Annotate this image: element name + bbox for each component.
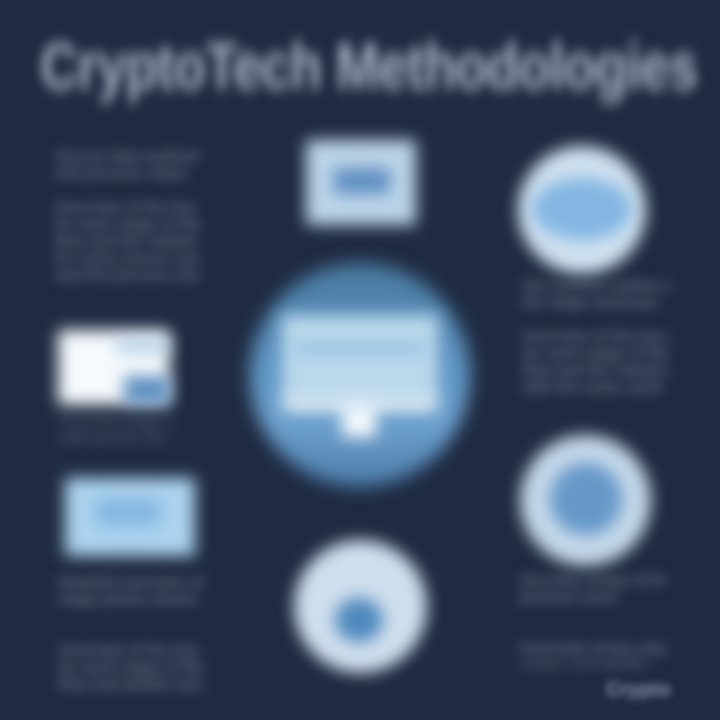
circle body	[250, 263, 470, 487]
card centre	[95, 498, 161, 526]
central hub circle	[238, 252, 482, 498]
text block: left bottom: stage points shown	[58, 591, 198, 608]
text block: left middle	[60, 412, 172, 446]
icon: left white card	[45, 317, 184, 418]
card body	[306, 140, 416, 225]
card centre	[334, 168, 390, 194]
icon: bottom center circle	[282, 528, 439, 685]
text block: left top: Secure data method	[55, 148, 198, 165]
screen	[282, 315, 438, 403]
text block: right lower: process used	[520, 589, 617, 606]
screen lines	[295, 343, 425, 353]
card body	[65, 478, 195, 556]
text block: left bottom	[56, 573, 205, 694]
text block: right upper: with the notes used	[522, 379, 662, 396]
card corner	[124, 376, 170, 404]
text block: left top: and process steps	[55, 165, 187, 182]
icon: top right circle	[506, 134, 658, 286]
inner disc	[532, 178, 632, 240]
title: CryptoTech Methodologies	[40, 29, 697, 103]
outer ring	[518, 146, 646, 274]
screen base	[284, 397, 436, 411]
text block: left top	[52, 147, 202, 285]
pointer	[342, 405, 376, 437]
text block: right lower	[518, 572, 667, 671]
footer logo: Crypto	[606, 679, 670, 701]
icon: right lower circle	[508, 423, 663, 578]
card top band	[116, 340, 170, 352]
outer ring	[294, 540, 427, 673]
inner glyph	[335, 598, 383, 642]
text block: right upper	[520, 276, 672, 396]
text block: right upper: the stage summary	[522, 294, 659, 311]
icon: left blue card	[52, 466, 208, 568]
icon: top center card	[294, 128, 428, 238]
inner disc	[550, 463, 622, 535]
text block: left middle: data points list	[60, 429, 166, 446]
outer ring	[520, 435, 651, 566]
card body	[58, 330, 170, 405]
